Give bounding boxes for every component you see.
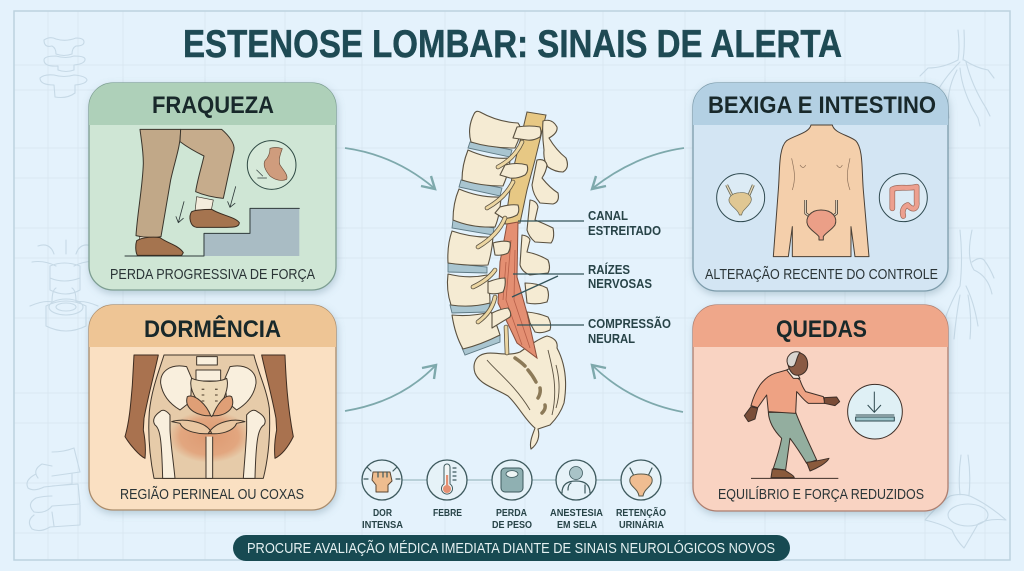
dormência heading: DORMÊNCIA — [144, 315, 281, 343]
label: compressão neural — [588, 316, 671, 346]
icon labels: FEBRE — [433, 507, 462, 519]
label: canal estreitado: CANAL — [588, 208, 628, 223]
nerve roots — [473, 142, 522, 353]
quedas heading: QUEDAS — [776, 316, 867, 343]
quedas caption: EQUILÍBRIO E FORÇA REDUZIDOS — [718, 486, 924, 503]
dormência caption: REGIÃO PERINEAL OU COXAS — [120, 486, 304, 503]
arrow: fraqueza to spine — [345, 148, 435, 189]
alert banner — [233, 535, 790, 561]
icon: perda de peso — [492, 460, 532, 500]
arrow: bexiga to spine — [592, 148, 684, 189]
illustration: pelvis and numb area — [125, 355, 293, 478]
alert banner: PROCURE AVALIAÇÃO MÉDICA IMEDIATA DIANTE DE SINAIS NEUROLÓGICOS NOVOS — [247, 540, 775, 557]
icon labels: RETENÇÃO — [616, 506, 666, 519]
arrow: quedas to spine — [592, 365, 683, 412]
icon labels: DOR — [373, 507, 392, 519]
decorative nerve outlines, right — [920, 30, 1006, 548]
icon labels: INTENSA — [362, 519, 403, 531]
compressed nerve bundle — [498, 222, 537, 358]
bexiga header band — [693, 83, 948, 125]
icon: febre — [427, 460, 467, 500]
label: raízes nervosas: NERVOSAS — [588, 276, 652, 291]
icon row: red flags — [362, 460, 661, 500]
pedicles — [488, 126, 541, 328]
icon: retenção urinária — [621, 460, 661, 500]
title: ESTENOSE LOMBAR: SINAIS DE ALERTA — [183, 23, 842, 66]
fraqueza heading: FRAQUEZA — [152, 92, 274, 119]
spine illustration — [447, 111, 584, 449]
label: compressão neural: COMPRESSÃO — [588, 316, 671, 331]
icon labels — [362, 506, 666, 531]
illustration: torso with bladder — [717, 125, 927, 257]
illustration: leg climbing stairs — [125, 129, 299, 256]
panel: bexiga e intestino — [693, 83, 948, 291]
panel: quedas — [693, 305, 948, 511]
fraqueza header band — [89, 83, 336, 125]
illustration: older man losing balance — [744, 352, 902, 478]
label: canal estreitado: ESTREITADO — [588, 223, 661, 238]
panel: dormência — [89, 305, 336, 510]
posterior processes — [520, 120, 567, 333]
decorative vertebra outlines, left — [27, 38, 98, 531]
icon: anestesia em sela — [556, 460, 596, 500]
label: compressão neural: NEURAL — [588, 331, 635, 346]
label: canal estreitado — [588, 208, 661, 238]
quedas header band — [693, 305, 948, 347]
icon labels: PERDA — [496, 507, 527, 519]
icon labels: EM SELA — [557, 519, 597, 531]
icon labels: ANESTESIA — [550, 507, 603, 519]
fraqueza caption: PERDA PROGRESSIVA DE FORÇA — [110, 266, 315, 283]
arrow: dormência to spine — [345, 365, 436, 411]
sacrum — [474, 336, 566, 449]
icon labels: URINÁRIA — [619, 518, 664, 531]
label: raízes nervosas — [588, 262, 652, 291]
icon labels: DE PESO — [492, 519, 532, 531]
dormência header band — [89, 305, 336, 347]
label: raízes nervosas: RAÍZES — [588, 262, 630, 277]
panel: fraqueza — [89, 83, 336, 290]
icon: dor intensa — [362, 460, 402, 500]
spinal canal — [505, 112, 546, 224]
bexiga caption: ALTERAÇÃO RECENTE DO CONTROLE — [705, 266, 938, 283]
bexiga heading: BEXIGA E INTESTINO — [708, 92, 936, 119]
leader lines — [512, 221, 584, 325]
